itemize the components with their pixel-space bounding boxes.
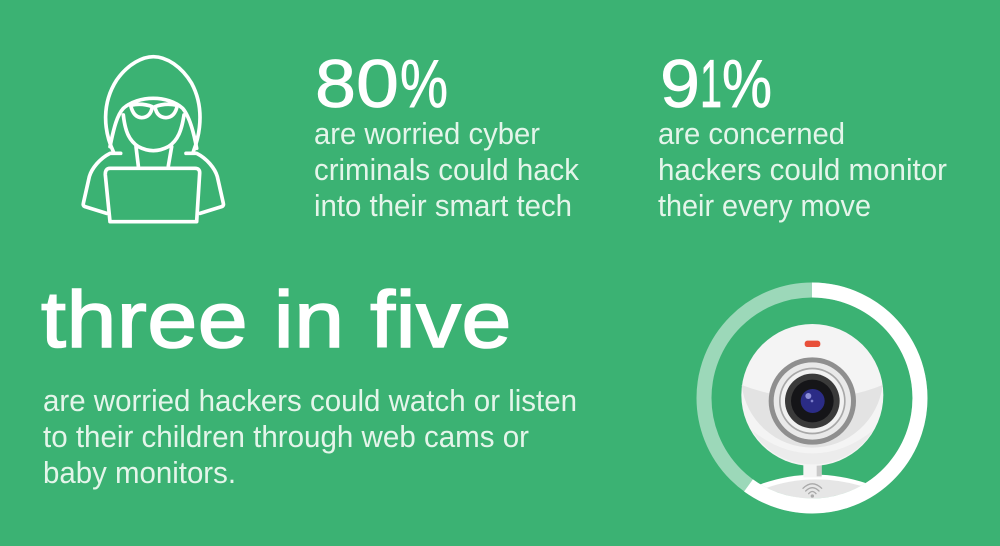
stat: 91 percent	[658, 46, 947, 223]
text block: children web cams	[43, 384, 577, 490]
icon: hooded hacker with laptop	[83, 57, 223, 222]
stat description: cyber criminals: criminals could hack	[314, 153, 580, 187]
stat number: 91%: 9	[660, 46, 700, 122]
text block: children web cams: to their children through web cams or	[43, 420, 529, 454]
chart: three-fifths progress ring	[704, 290, 920, 506]
stat number: 80%: %	[400, 46, 448, 122]
lens	[769, 357, 856, 445]
camera stem	[803, 463, 822, 477]
stat number: 80%: 8	[315, 46, 356, 122]
stat description: cyber criminals: into their smart tech	[314, 189, 572, 223]
text block: children web cams: baby monitors.	[43, 456, 236, 490]
stat number: 91%: %	[722, 46, 772, 122]
stat number: 80%: 0	[356, 46, 399, 122]
indicator light	[805, 341, 820, 347]
stat number: 91%: 1	[700, 46, 722, 122]
heading: three in five: three in five	[41, 275, 512, 364]
stat description: hackers monitoring: hackers could monitor	[658, 153, 947, 187]
stat description: cyber criminals: are worried cyber	[314, 117, 540, 151]
stat description: hackers monitoring: are concerned	[658, 117, 845, 151]
stat description: hackers monitoring	[658, 117, 947, 223]
camera head	[741, 324, 883, 466]
text block: children web cams: are worried hackers could watch or listen	[43, 384, 577, 418]
stat: 80 percent	[314, 46, 580, 223]
stat description: cyber criminals	[314, 117, 580, 223]
stat description: hackers monitoring: their every move	[658, 189, 871, 223]
wifi symbol	[803, 484, 822, 497]
camera base	[760, 474, 866, 498]
icon: web camera	[741, 324, 883, 510]
